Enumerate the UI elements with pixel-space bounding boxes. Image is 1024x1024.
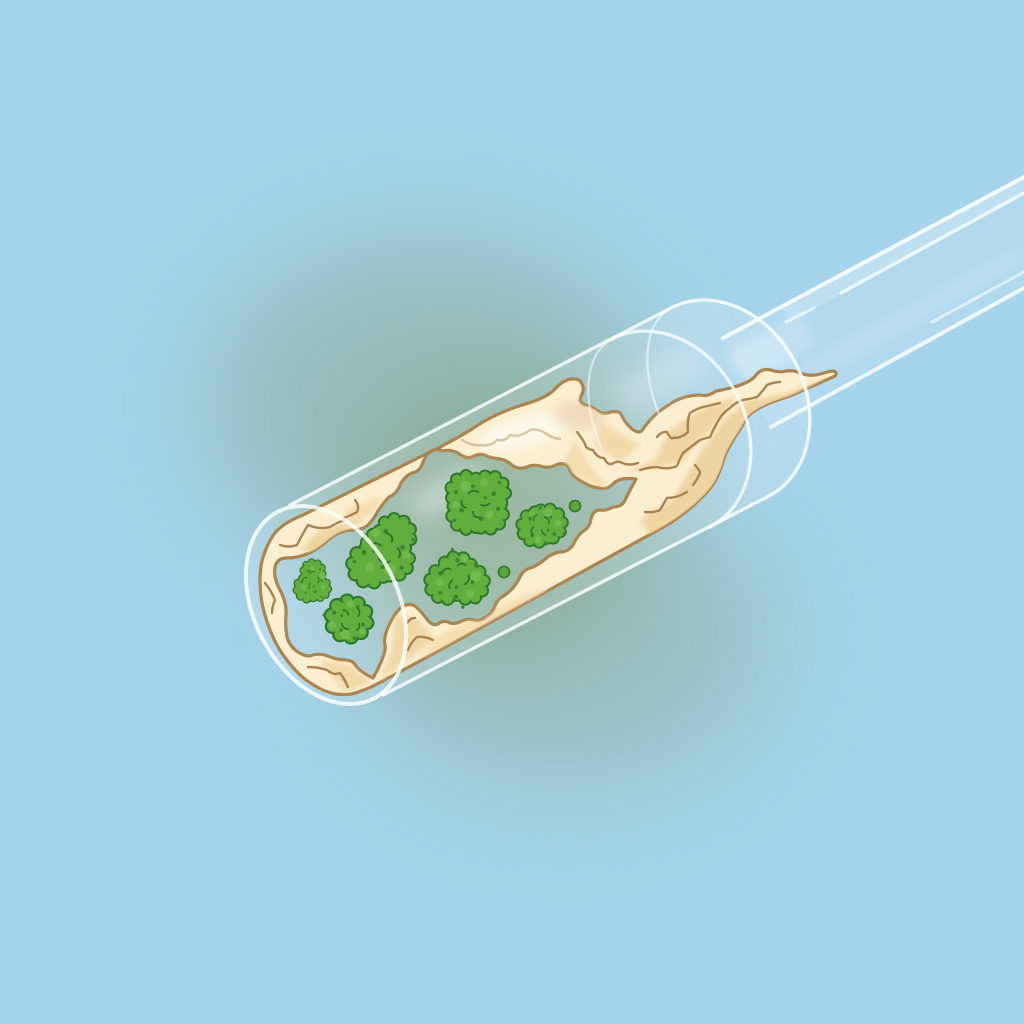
narrow tube top glare xyxy=(780,177,1024,322)
narrow tube soft streak xyxy=(800,245,1024,380)
wide tube outline lines xyxy=(290,308,769,695)
clump: behind glass rim xyxy=(343,508,424,591)
plaque fill and outline xyxy=(260,370,836,695)
end cap ring xyxy=(214,479,438,731)
wide tube glass body xyxy=(246,300,810,705)
cavity glass glare xyxy=(405,340,715,520)
rear rim front arc xyxy=(671,269,844,496)
clump: lower centre xyxy=(419,547,499,613)
plaque crease lines xyxy=(265,382,780,687)
plaque pink tone xyxy=(554,401,606,429)
narrow tube xyxy=(722,177,1024,427)
glare inside the rim xyxy=(722,314,815,385)
dot: green spore centre xyxy=(498,566,510,578)
narrow tube edges xyxy=(723,177,1024,427)
clump: upper centre xyxy=(438,460,521,543)
inner rim xyxy=(559,300,785,555)
plaque layer xyxy=(260,370,836,695)
narrow tube body xyxy=(723,177,1024,427)
inner rim back arc xyxy=(559,339,654,447)
plaque highlight xyxy=(478,410,568,458)
plaque shading xyxy=(300,376,830,692)
clump: upper right xyxy=(512,495,576,553)
rear rim back arc xyxy=(618,308,713,416)
dot: green spore right xyxy=(570,500,580,512)
inner rim front arc xyxy=(612,300,785,527)
green clumps xyxy=(287,460,580,649)
clump: small left xyxy=(287,556,333,608)
olive haze behind tube xyxy=(205,235,780,795)
rear rim xyxy=(618,269,844,524)
clump: lower left xyxy=(319,589,379,649)
